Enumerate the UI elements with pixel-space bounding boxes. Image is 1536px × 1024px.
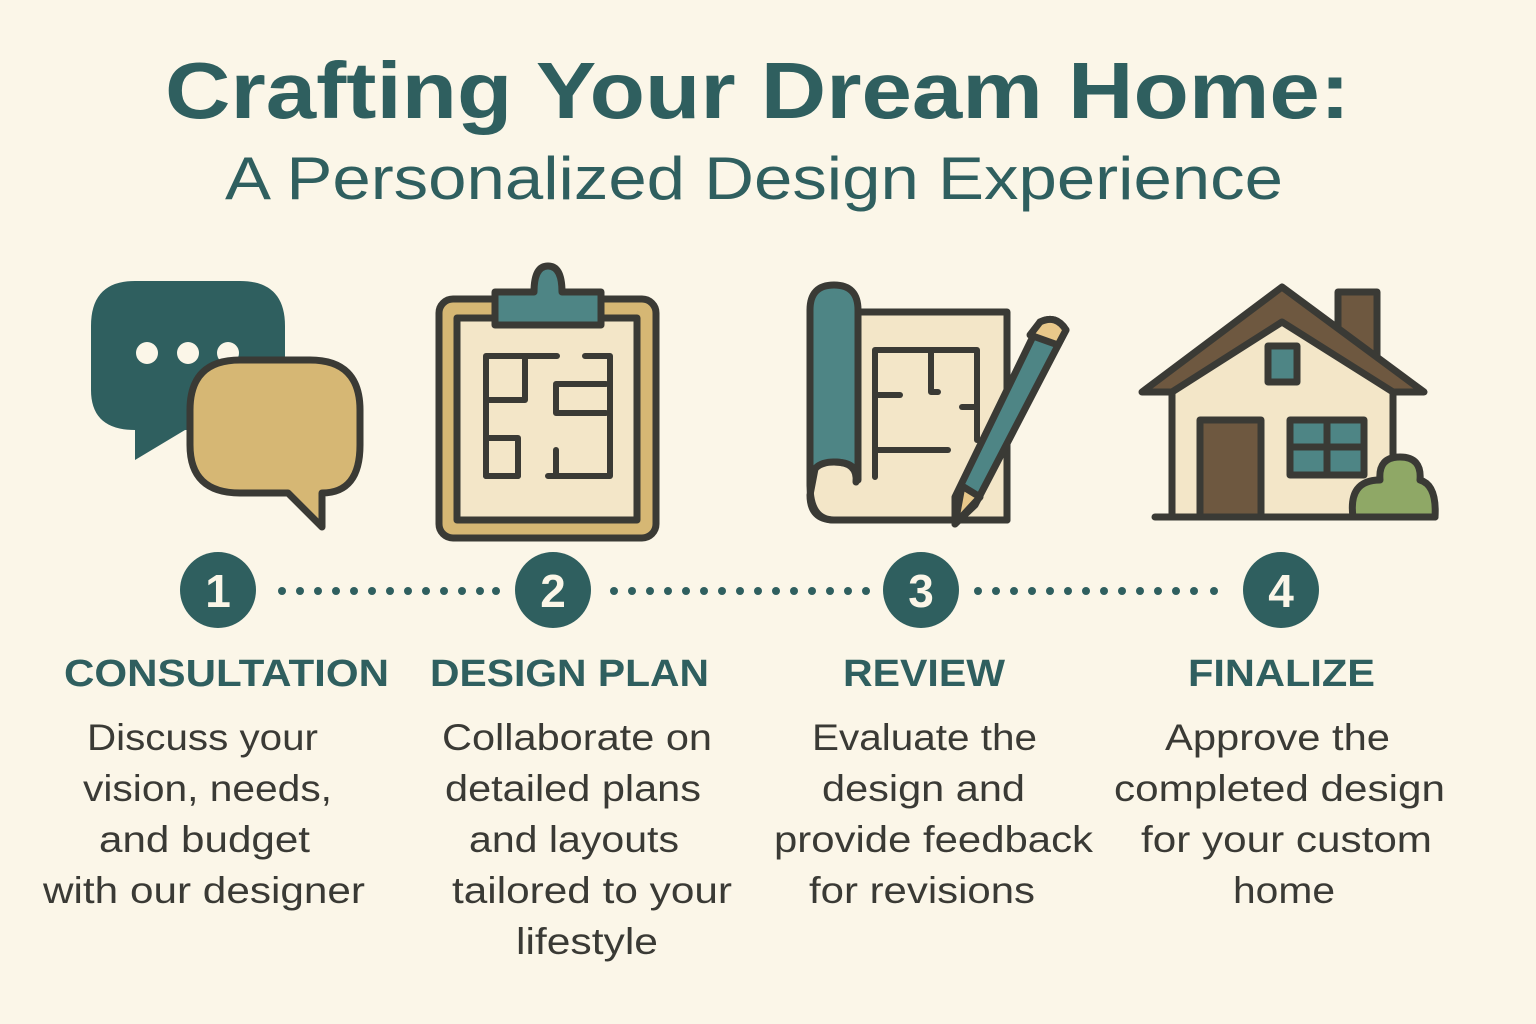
text: review description: for revisions bbox=[809, 870, 1035, 911]
step 3 number bbox=[883, 552, 959, 628]
text: consultation description bbox=[42, 717, 365, 911]
icon: chat bubbles bbox=[91, 281, 360, 527]
icon: clipboard with floor plan bbox=[439, 266, 656, 538]
text: finalize description: home bbox=[1233, 870, 1335, 911]
text: review description: provide feedback bbox=[774, 819, 1094, 860]
timeline dots bbox=[278, 587, 1218, 595]
icon: house bbox=[1142, 287, 1435, 517]
text: consultation description: vision, needs, bbox=[83, 768, 332, 809]
step 1 number bbox=[180, 552, 256, 628]
subtitle: A Personalized Design Experience bbox=[225, 145, 1283, 212]
text: review description: design and bbox=[822, 768, 1025, 809]
step 3 number: 3 bbox=[908, 565, 934, 617]
text: consultation description: and budget bbox=[99, 819, 311, 860]
text: finalize description: Approve the bbox=[1165, 717, 1390, 758]
text: design plan description: tailored to your bbox=[452, 870, 732, 911]
text: review description bbox=[774, 717, 1094, 911]
text: design plan description: Collaborate on bbox=[442, 717, 712, 758]
text: finalize description: completed design bbox=[1114, 768, 1445, 809]
text: design plan description bbox=[442, 717, 732, 962]
text: design plan description: and layouts bbox=[469, 819, 679, 860]
text: design plan description: detailed plans bbox=[445, 768, 701, 809]
step 1 number: 1 bbox=[205, 565, 231, 617]
text: consultation description: Discuss your bbox=[87, 717, 318, 758]
text: review description: Evaluate the bbox=[812, 717, 1037, 758]
icon: blueprint roll and pencil bbox=[810, 285, 1066, 524]
text: finalize description: for your custom bbox=[1141, 819, 1432, 860]
step 4 number: 4 bbox=[1268, 565, 1294, 617]
heading: design plan: DESIGN PLAN bbox=[430, 653, 709, 695]
heading: finalize: FINALIZE bbox=[1188, 653, 1375, 695]
step 2 number bbox=[515, 552, 591, 628]
text: design plan description: lifestyle bbox=[516, 921, 658, 962]
step 4 number bbox=[1243, 552, 1319, 628]
heading: review: REVIEW bbox=[843, 653, 1005, 695]
text: consultation description: with our designer bbox=[42, 870, 365, 911]
title: Crafting Your Dream Home: bbox=[165, 46, 1350, 135]
text: finalize description bbox=[1114, 717, 1445, 911]
heading: consultation: CONSULTATION bbox=[64, 653, 389, 695]
step 2 number: 2 bbox=[540, 565, 566, 617]
